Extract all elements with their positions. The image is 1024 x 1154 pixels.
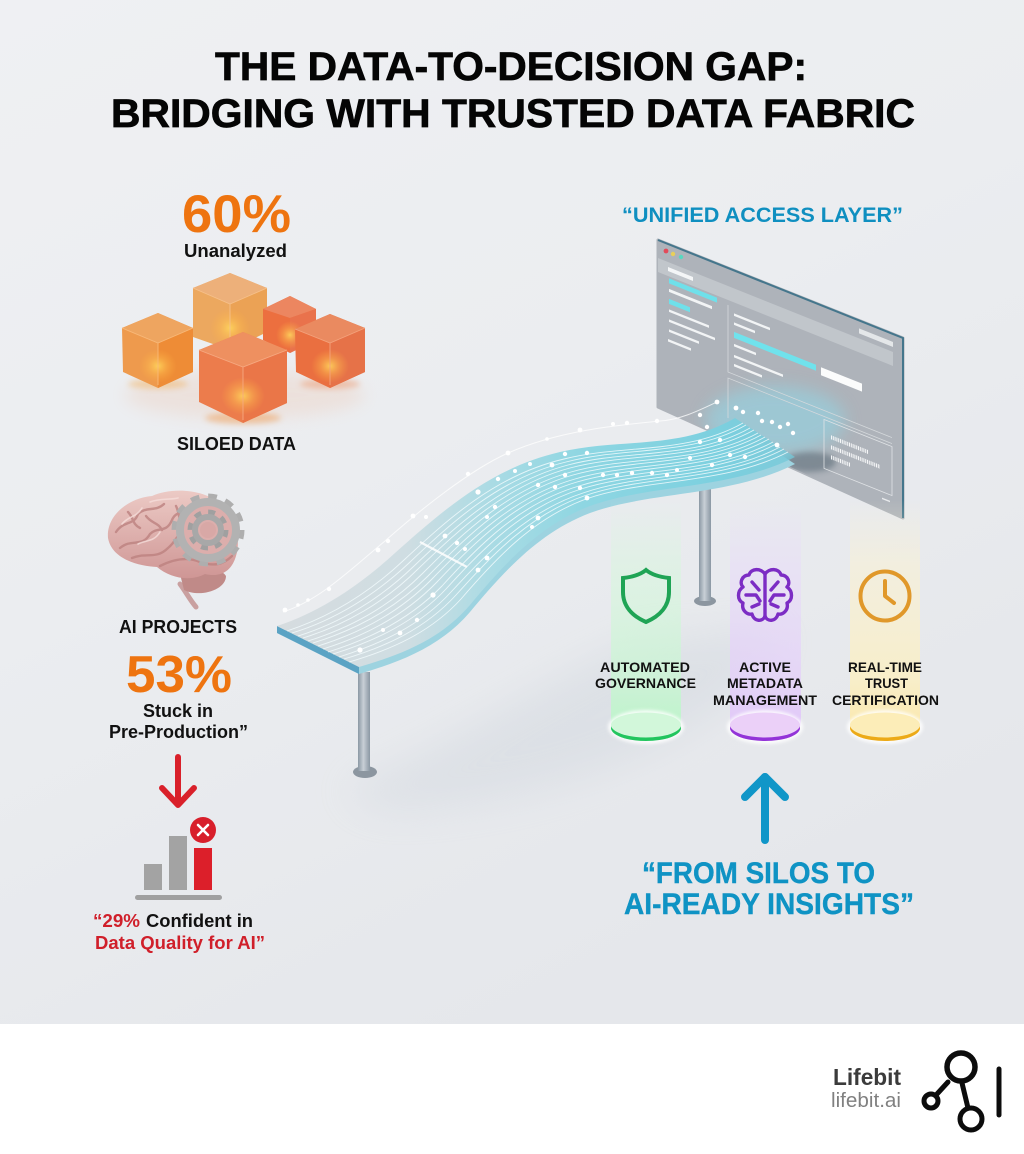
base: yellow [847, 710, 923, 744]
brand: Lifebit wordmark [831, 1064, 901, 1112]
brand: Lifebit logo [924, 1053, 999, 1130]
label: automated governance: AUTOMATED [600, 659, 690, 675]
stat: 29% confident [93, 911, 265, 953]
label: real-time trust certification [832, 659, 939, 708]
pillar: automated governance [595, 500, 696, 744]
pillar: active metadata management [713, 500, 817, 744]
icon: bar chart with error badge [135, 817, 222, 900]
brand: Lifebit wordmark: lifebit.ai [831, 1090, 901, 1112]
label: siloed data: SILOED DATA [177, 434, 296, 454]
title: THE DATA-TO-DECISION GAP: [215, 45, 807, 89]
cube: back [193, 273, 267, 350]
label: active metadata management: METADATA [727, 675, 803, 691]
cube: front [199, 332, 287, 424]
icon: siloed data cubes [122, 273, 365, 424]
heading: unified access layer: “UNIFIED ACCESS LAYER” [622, 204, 903, 227]
callout: from silos to AI-ready insights: “FROM SILOS TO [642, 857, 875, 890]
data fabric ribbon bridge [277, 400, 795, 674]
pillar: real-time trust certification [832, 500, 939, 744]
stat: AI projects 53% stuck: Stuck in [143, 701, 213, 721]
arrow: up blue [745, 777, 785, 840]
label: real-time trust certification: REAL-TIME [848, 659, 922, 675]
icon: shield [623, 570, 669, 622]
floor shadow [340, 630, 780, 810]
icon: clock [860, 572, 910, 620]
brand: Lifebit wordmark: Lifebit [833, 1064, 901, 1090]
label: real-time trust certification: TRUST [865, 675, 908, 691]
stat: 29% confident: “29% [93, 911, 140, 931]
icon: brain with gear [108, 491, 241, 607]
label: active metadata management: MANAGEMENT [713, 692, 817, 708]
title [111, 45, 915, 136]
label: active metadata management [713, 659, 817, 708]
stat: AI projects 53% stuck: 53% [126, 646, 232, 704]
beam: purple [730, 500, 801, 726]
leg: left support [353, 672, 377, 778]
arrow: down red [162, 757, 194, 805]
callout: from silos to AI-ready insights [624, 857, 914, 921]
title: BRIDGING WITH TRUSTED DATA FABRIC [111, 92, 915, 136]
stat: AI projects 53% stuck [109, 617, 248, 742]
cube: small right [263, 296, 316, 353]
label: active metadata management: ACTIVE [739, 659, 791, 675]
stat: 60% unanalyzed: Unanalyzed [184, 241, 287, 261]
label: real-time trust certification: CERTIFICATION [832, 692, 939, 708]
callout: from silos to AI-ready insights: AI-READY INSIGHTS” [624, 888, 914, 921]
stat: 29% confident: Data Quality for AI” [95, 933, 265, 953]
label: automated governance [595, 659, 696, 691]
stat: AI projects 53% stuck: Pre-Production” [109, 722, 248, 742]
icon: brain outline [738, 570, 792, 620]
footer band [0, 1024, 1024, 1154]
screen: access layer interface [658, 240, 903, 518]
base: purple [727, 710, 803, 744]
beam: yellow [850, 500, 920, 726]
cube: right [295, 314, 365, 389]
beam: green [611, 500, 681, 726]
stat: 29% confident: Confident in [146, 911, 253, 931]
stat: AI projects 53% stuck: AI PROJECTS [119, 617, 237, 637]
cube: left [122, 313, 193, 389]
base: green [608, 710, 684, 744]
leg: right support [694, 478, 716, 606]
stat: 60% unanalyzed: 60% [182, 185, 291, 244]
label: automated governance: GOVERNANCE [595, 675, 696, 691]
